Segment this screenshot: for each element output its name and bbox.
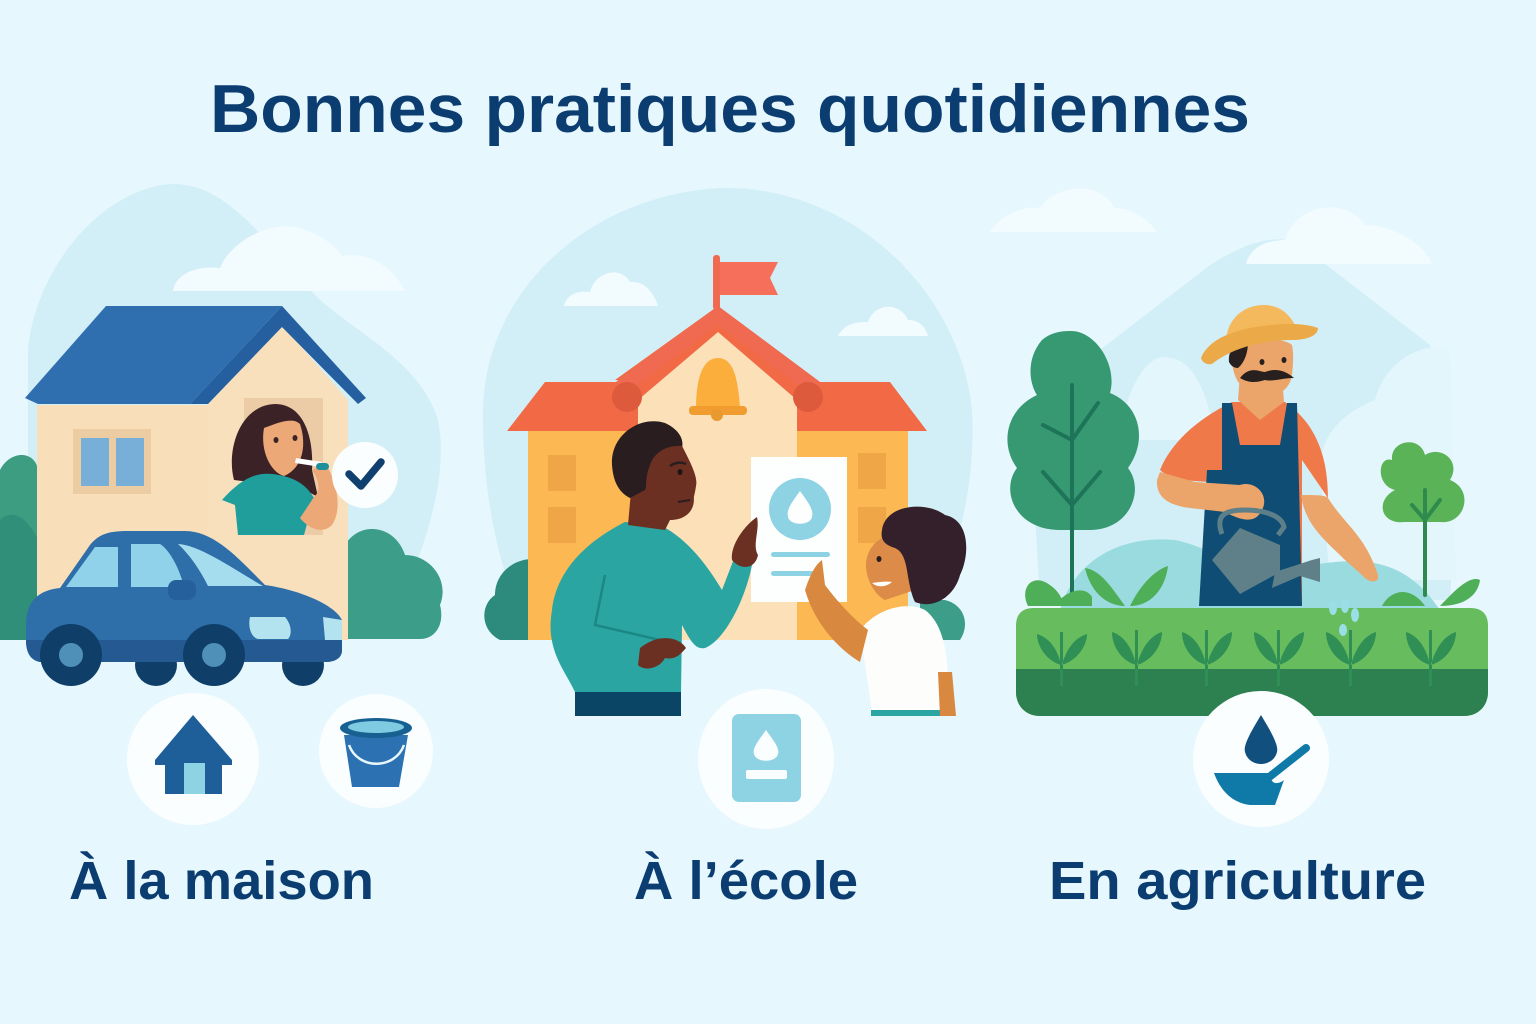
check badge bbox=[332, 442, 398, 508]
panel: at home illustration bbox=[0, 184, 443, 911]
house window bbox=[73, 429, 151, 494]
school center bbox=[638, 325, 797, 640]
flag bbox=[713, 255, 778, 310]
clouds bbox=[990, 188, 1456, 580]
watering can bbox=[1212, 510, 1320, 594]
seedlings bbox=[1037, 630, 1456, 686]
small tree bbox=[1381, 442, 1464, 595]
child bbox=[805, 507, 966, 716]
panel: agriculture illustration bbox=[990, 188, 1488, 911]
garden bed bbox=[1016, 608, 1488, 716]
distant hills bbox=[1060, 539, 1440, 610]
bell bbox=[689, 358, 747, 421]
title: Bonnes pratiques quotidiennes bbox=[210, 71, 1250, 147]
big tree bbox=[1007, 331, 1139, 600]
panel: at school illustration bbox=[483, 188, 973, 911]
water droplets bbox=[1329, 599, 1359, 636]
icon: house bbox=[127, 693, 259, 825]
adult bbox=[551, 421, 758, 716]
school side wings bbox=[528, 430, 908, 640]
cloud bbox=[173, 226, 405, 291]
school roof bbox=[507, 306, 927, 431]
house wall bbox=[37, 405, 348, 640]
bushes bbox=[0, 455, 443, 640]
background hill bbox=[483, 188, 973, 610]
label: school: À l’école bbox=[634, 851, 858, 911]
background hill bbox=[28, 184, 441, 640]
label: agriculture: En agriculture bbox=[1049, 851, 1426, 911]
clouds bbox=[564, 272, 928, 336]
label: home: À la maison bbox=[69, 851, 374, 911]
house roof bbox=[25, 306, 366, 404]
icon: drop and trowel bbox=[1193, 691, 1329, 827]
farmer bbox=[1157, 305, 1378, 606]
car bbox=[26, 531, 342, 686]
icon: bucket bbox=[319, 694, 433, 808]
poster bbox=[751, 457, 847, 602]
shrubs bbox=[1025, 566, 1480, 606]
background hills bbox=[1030, 239, 1453, 600]
bushes bbox=[484, 559, 965, 640]
person brushing teeth bbox=[222, 398, 338, 535]
icon: document drop bbox=[698, 689, 834, 829]
